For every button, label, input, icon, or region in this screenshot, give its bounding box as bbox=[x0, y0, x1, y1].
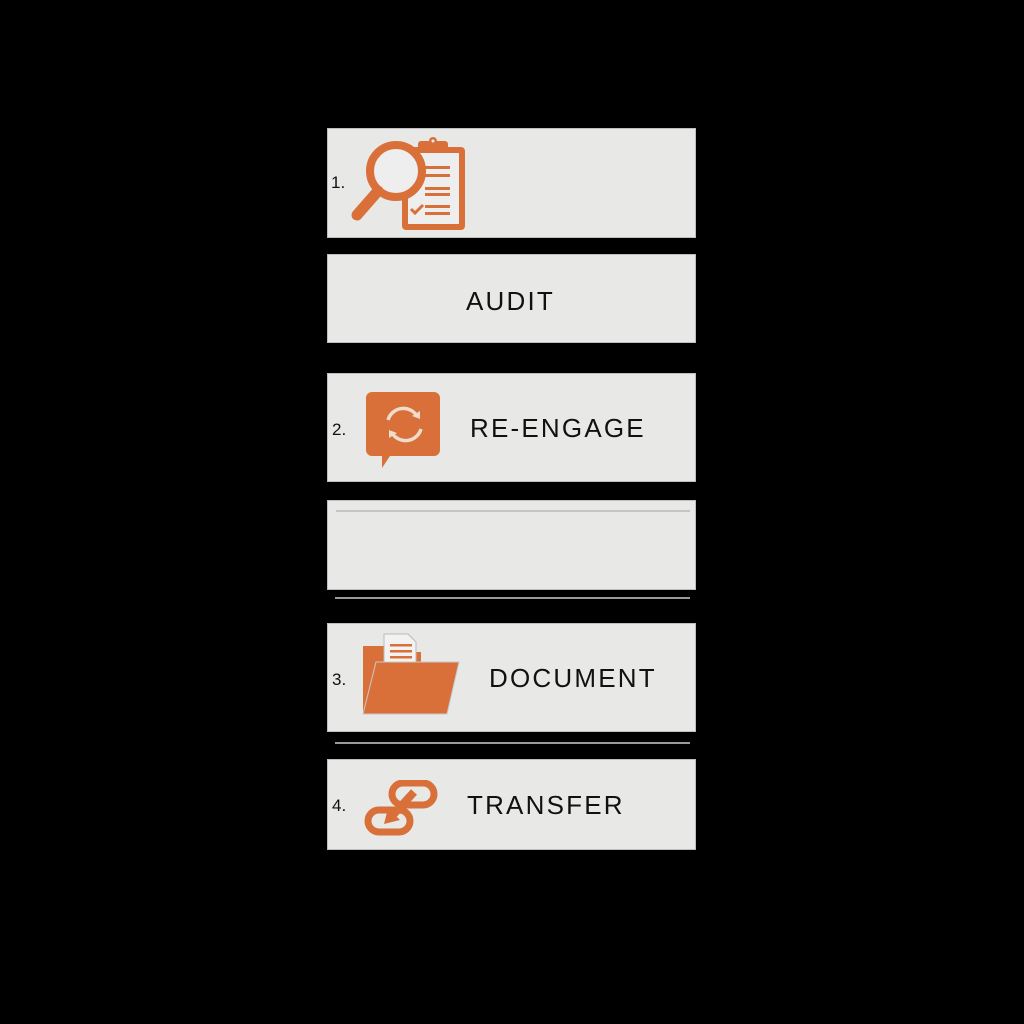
heading: RE-ENGAGE: RE-ENGAGE bbox=[470, 413, 646, 443]
number 4: 4. bbox=[332, 796, 346, 815]
panel: step 4 transfer bbox=[327, 759, 696, 850]
panel: step 3 document bbox=[327, 623, 696, 732]
icon: folder bbox=[362, 634, 460, 714]
panel: step 1 icon bbox=[327, 128, 696, 238]
panel: step 2 re-engage bbox=[327, 373, 696, 482]
icon: magnifier clipboard bbox=[352, 137, 465, 230]
panel: audit label bbox=[327, 254, 696, 343]
icon: link arrow bbox=[364, 780, 438, 836]
heading: AUDIT: AUDIT bbox=[466, 286, 555, 316]
heading: TRANSFER: TRANSFER bbox=[467, 790, 625, 820]
icon: chat refresh bbox=[366, 392, 440, 468]
panel: empty bbox=[327, 500, 696, 590]
number 1: 1. bbox=[331, 173, 345, 192]
number 3: 3. bbox=[332, 670, 346, 689]
heading: DOCUMENT: DOCUMENT bbox=[489, 663, 657, 693]
number 2: 2. bbox=[332, 420, 346, 439]
